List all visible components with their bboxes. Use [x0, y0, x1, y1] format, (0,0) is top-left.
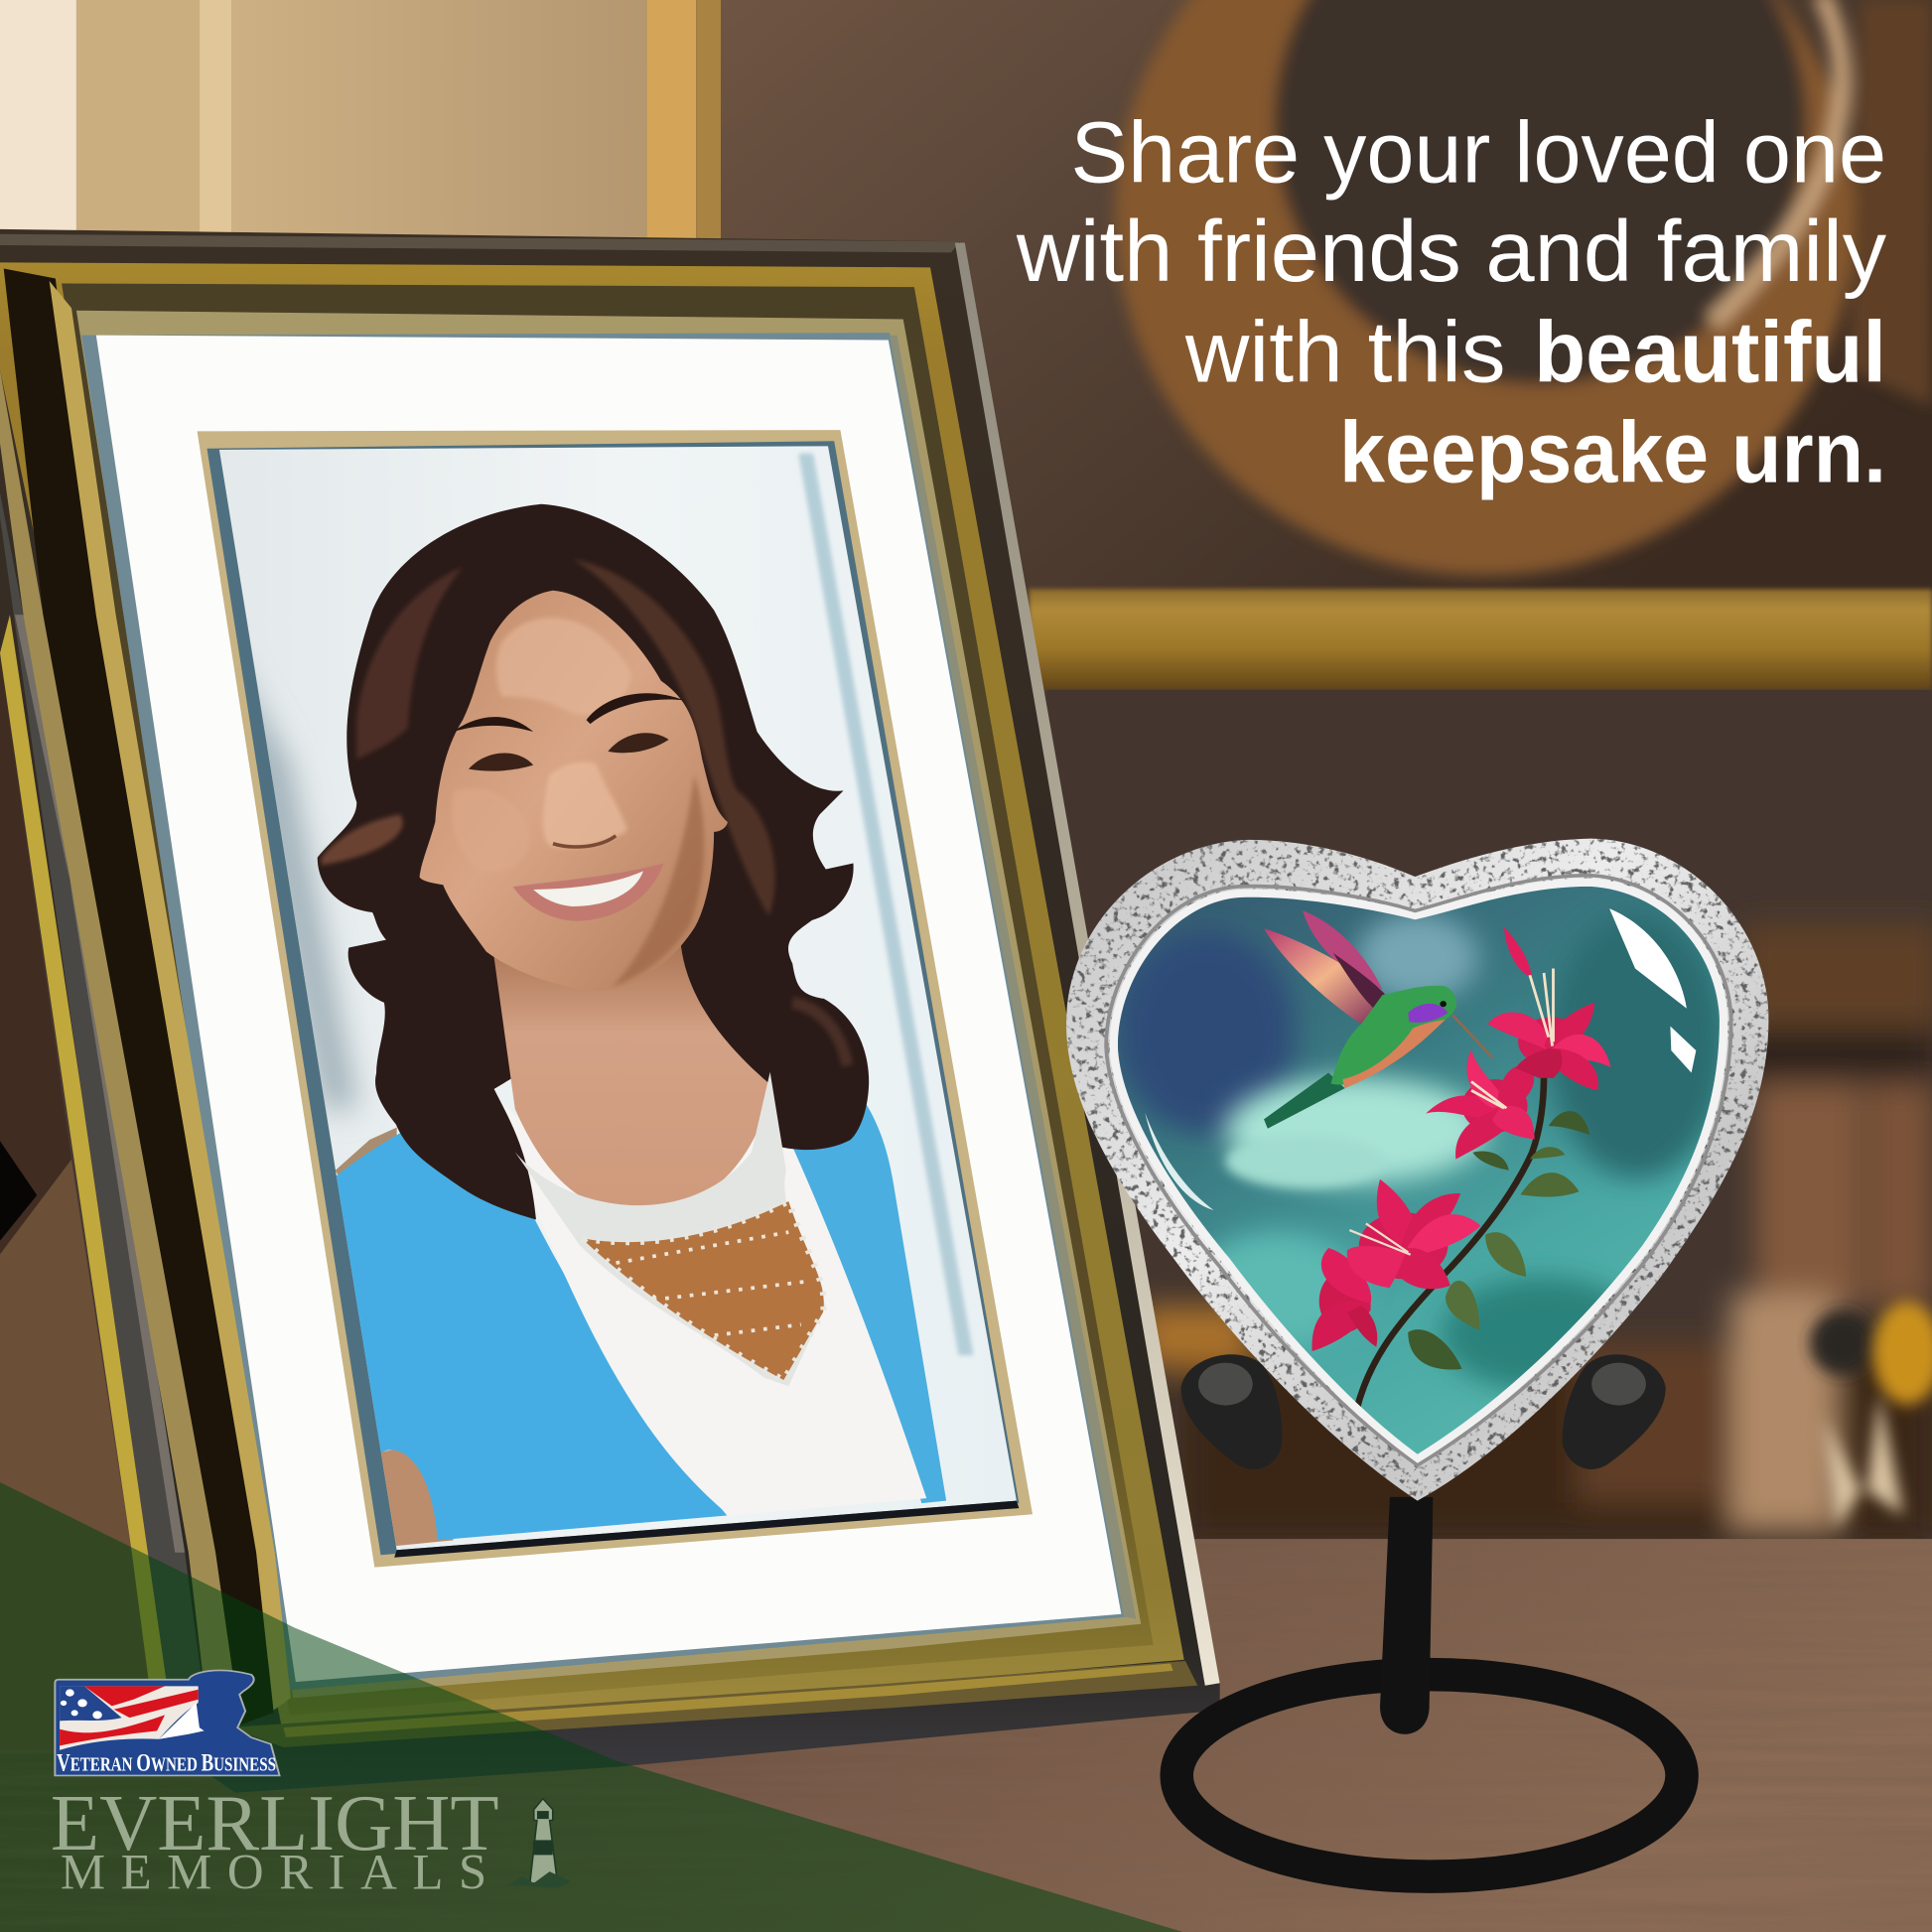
shoulder background: [336, 1128, 397, 1174]
lower flowers: [1311, 1179, 1480, 1351]
upper flowers: [1426, 927, 1611, 1160]
dark wall left of frame: [0, 653, 71, 1254]
face: [420, 591, 728, 991]
picture frame: [0, 229, 1220, 1793]
framed portrait photo: [219, 446, 1017, 1551]
icon: lighthouse: [506, 1799, 571, 1888]
everlight memorials wordmark: MEMORIALS: [61, 1846, 486, 1901]
headline: with this: [1184, 305, 1506, 401]
inner window bevel: [198, 430, 1033, 1568]
brows: [453, 717, 533, 732]
lace collar: [515, 1072, 826, 1386]
forearm: [381, 1449, 454, 1547]
silver engraved rim: [1066, 839, 1768, 1501]
white top: [502, 1105, 927, 1511]
mirror ring: [1115, 0, 1932, 576]
heart urn with hummingbird artwork: [1066, 839, 1768, 1501]
veteran owned business badge: [55, 1670, 280, 1776]
headline: beautiful: [1534, 305, 1886, 401]
left moulding strips: [0, 269, 291, 1749]
black object behind frame: [0, 1141, 37, 1241]
right rubber peg: [1563, 1354, 1666, 1469]
white mat: [96, 336, 1121, 1682]
everlight memorials wordmark: EVERLIGHT: [51, 1779, 499, 1867]
veteran owned business badge: VETERAN OWNED BUSINESS: [57, 1749, 276, 1776]
headline: with friends and family: [1016, 204, 1887, 300]
neck and chest: [492, 936, 770, 1213]
glass highlights: [1609, 908, 1687, 1009]
eyes: [469, 753, 533, 771]
mouth: [513, 864, 663, 921]
wooden table: [0, 1539, 1932, 1932]
teal sky dome: [1118, 886, 1720, 1454]
left rubber peg: [1181, 1354, 1282, 1469]
headline: Share your loved one: [1070, 105, 1886, 202]
photo bottom shadow line: [394, 1501, 1019, 1558]
hummingbird: [1264, 910, 1492, 1129]
nose: [543, 761, 627, 848]
easel back of the frame: [0, 1160, 160, 1749]
jacket: [336, 1097, 727, 1540]
green corner overlay: [0, 1482, 1182, 1932]
gold moulding: [1029, 589, 1932, 690]
urn stand: [1176, 1497, 1682, 1876]
headline: [1016, 105, 1887, 500]
headline: keepsake urn.: [1339, 404, 1886, 500]
stem and leaves: [1356, 1075, 1589, 1410]
hair: [318, 504, 869, 1220]
